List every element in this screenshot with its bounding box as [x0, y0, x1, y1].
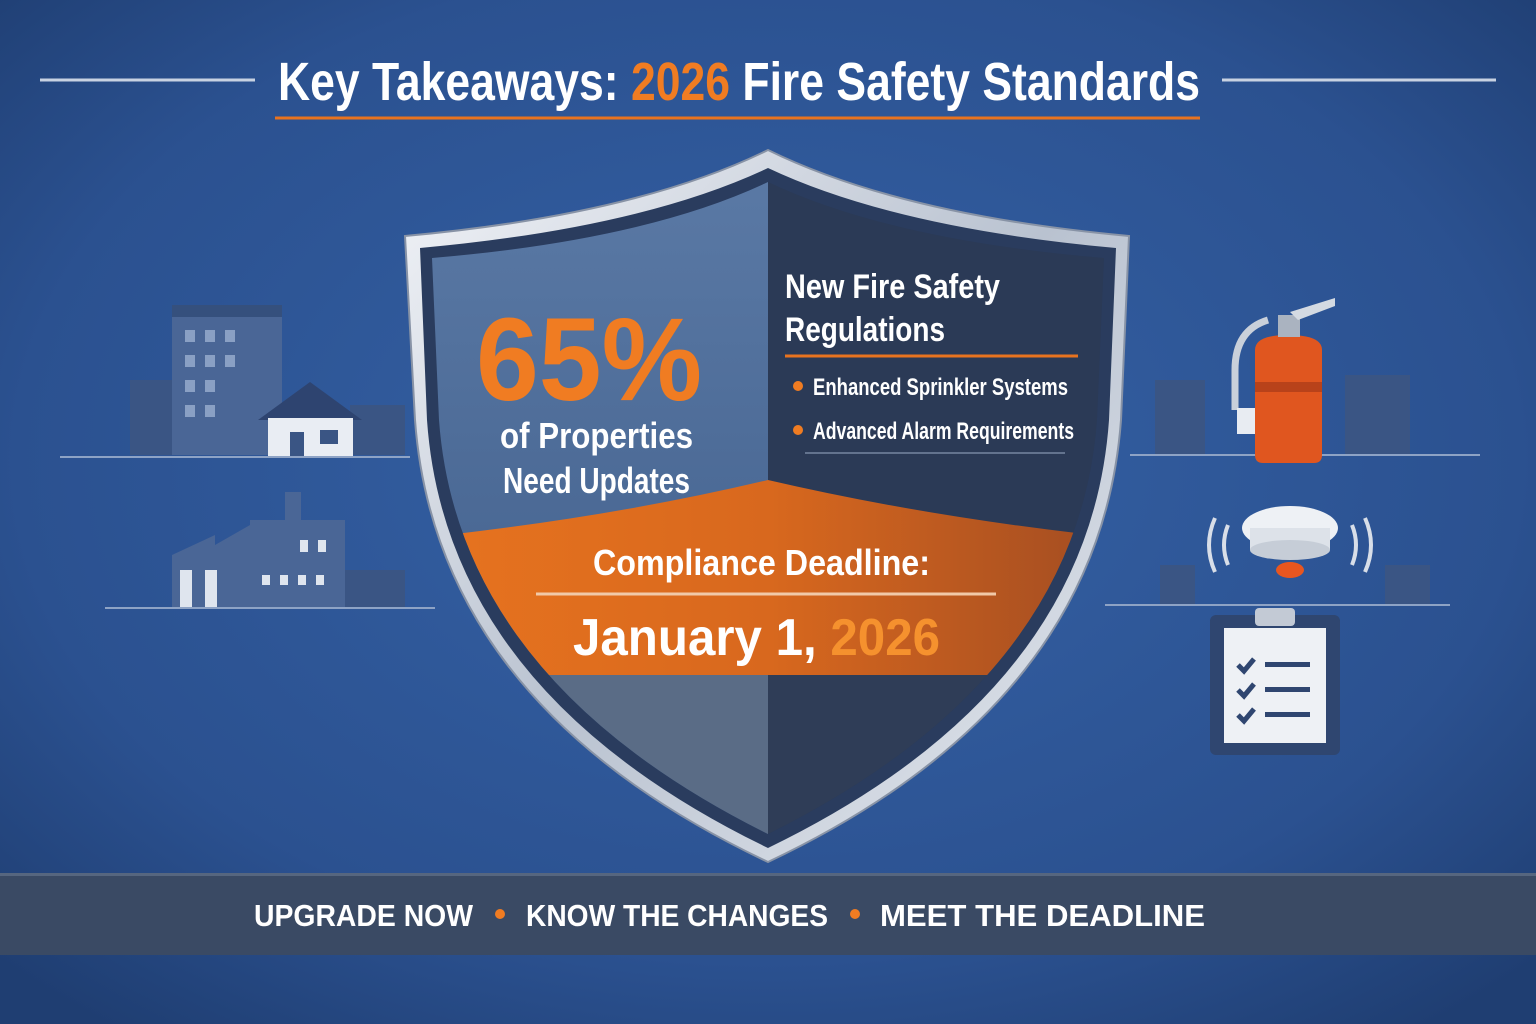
stat: 65%: of Properties: [500, 415, 693, 456]
left icons: buildings: [60, 305, 410, 458]
bottom banner: MEET THE DEADLINE: [880, 898, 1205, 933]
bottom banner: [0, 873, 1536, 955]
text block: regulations: Enhanced Sprinkler Systems: [813, 374, 1068, 401]
icon: house: [258, 382, 362, 458]
text block: regulations: [785, 268, 1078, 453]
right icons: clipboard: [1210, 608, 1340, 755]
left icons: factory: [105, 492, 435, 608]
bottom banner: UPGRADE NOW: [254, 898, 474, 933]
deadline: [536, 542, 996, 667]
text block: regulations: New Fire Safety: [785, 268, 1000, 306]
stat: 65%: [476, 294, 702, 501]
stat: 65%: 65%: [476, 294, 702, 426]
deadline: January 1, 2026: [573, 609, 940, 667]
title: Key Takeaways: 2026 Fire Safety Standards: [278, 52, 1200, 112]
bottom banner: KNOW THE CHANGES: [526, 898, 828, 933]
shield: [400, 150, 1148, 870]
right icons: extinguisher: [1130, 298, 1480, 463]
right icons: smoke detector: [1105, 506, 1450, 605]
text block: regulations: Advanced Alarm Requirements: [813, 418, 1074, 445]
orange band: [462, 480, 1074, 675]
text block: regulations: Regulations: [785, 311, 945, 349]
deadline: Compliance Deadline:: [593, 542, 930, 583]
stat: 65%: Need Updates: [503, 460, 690, 501]
